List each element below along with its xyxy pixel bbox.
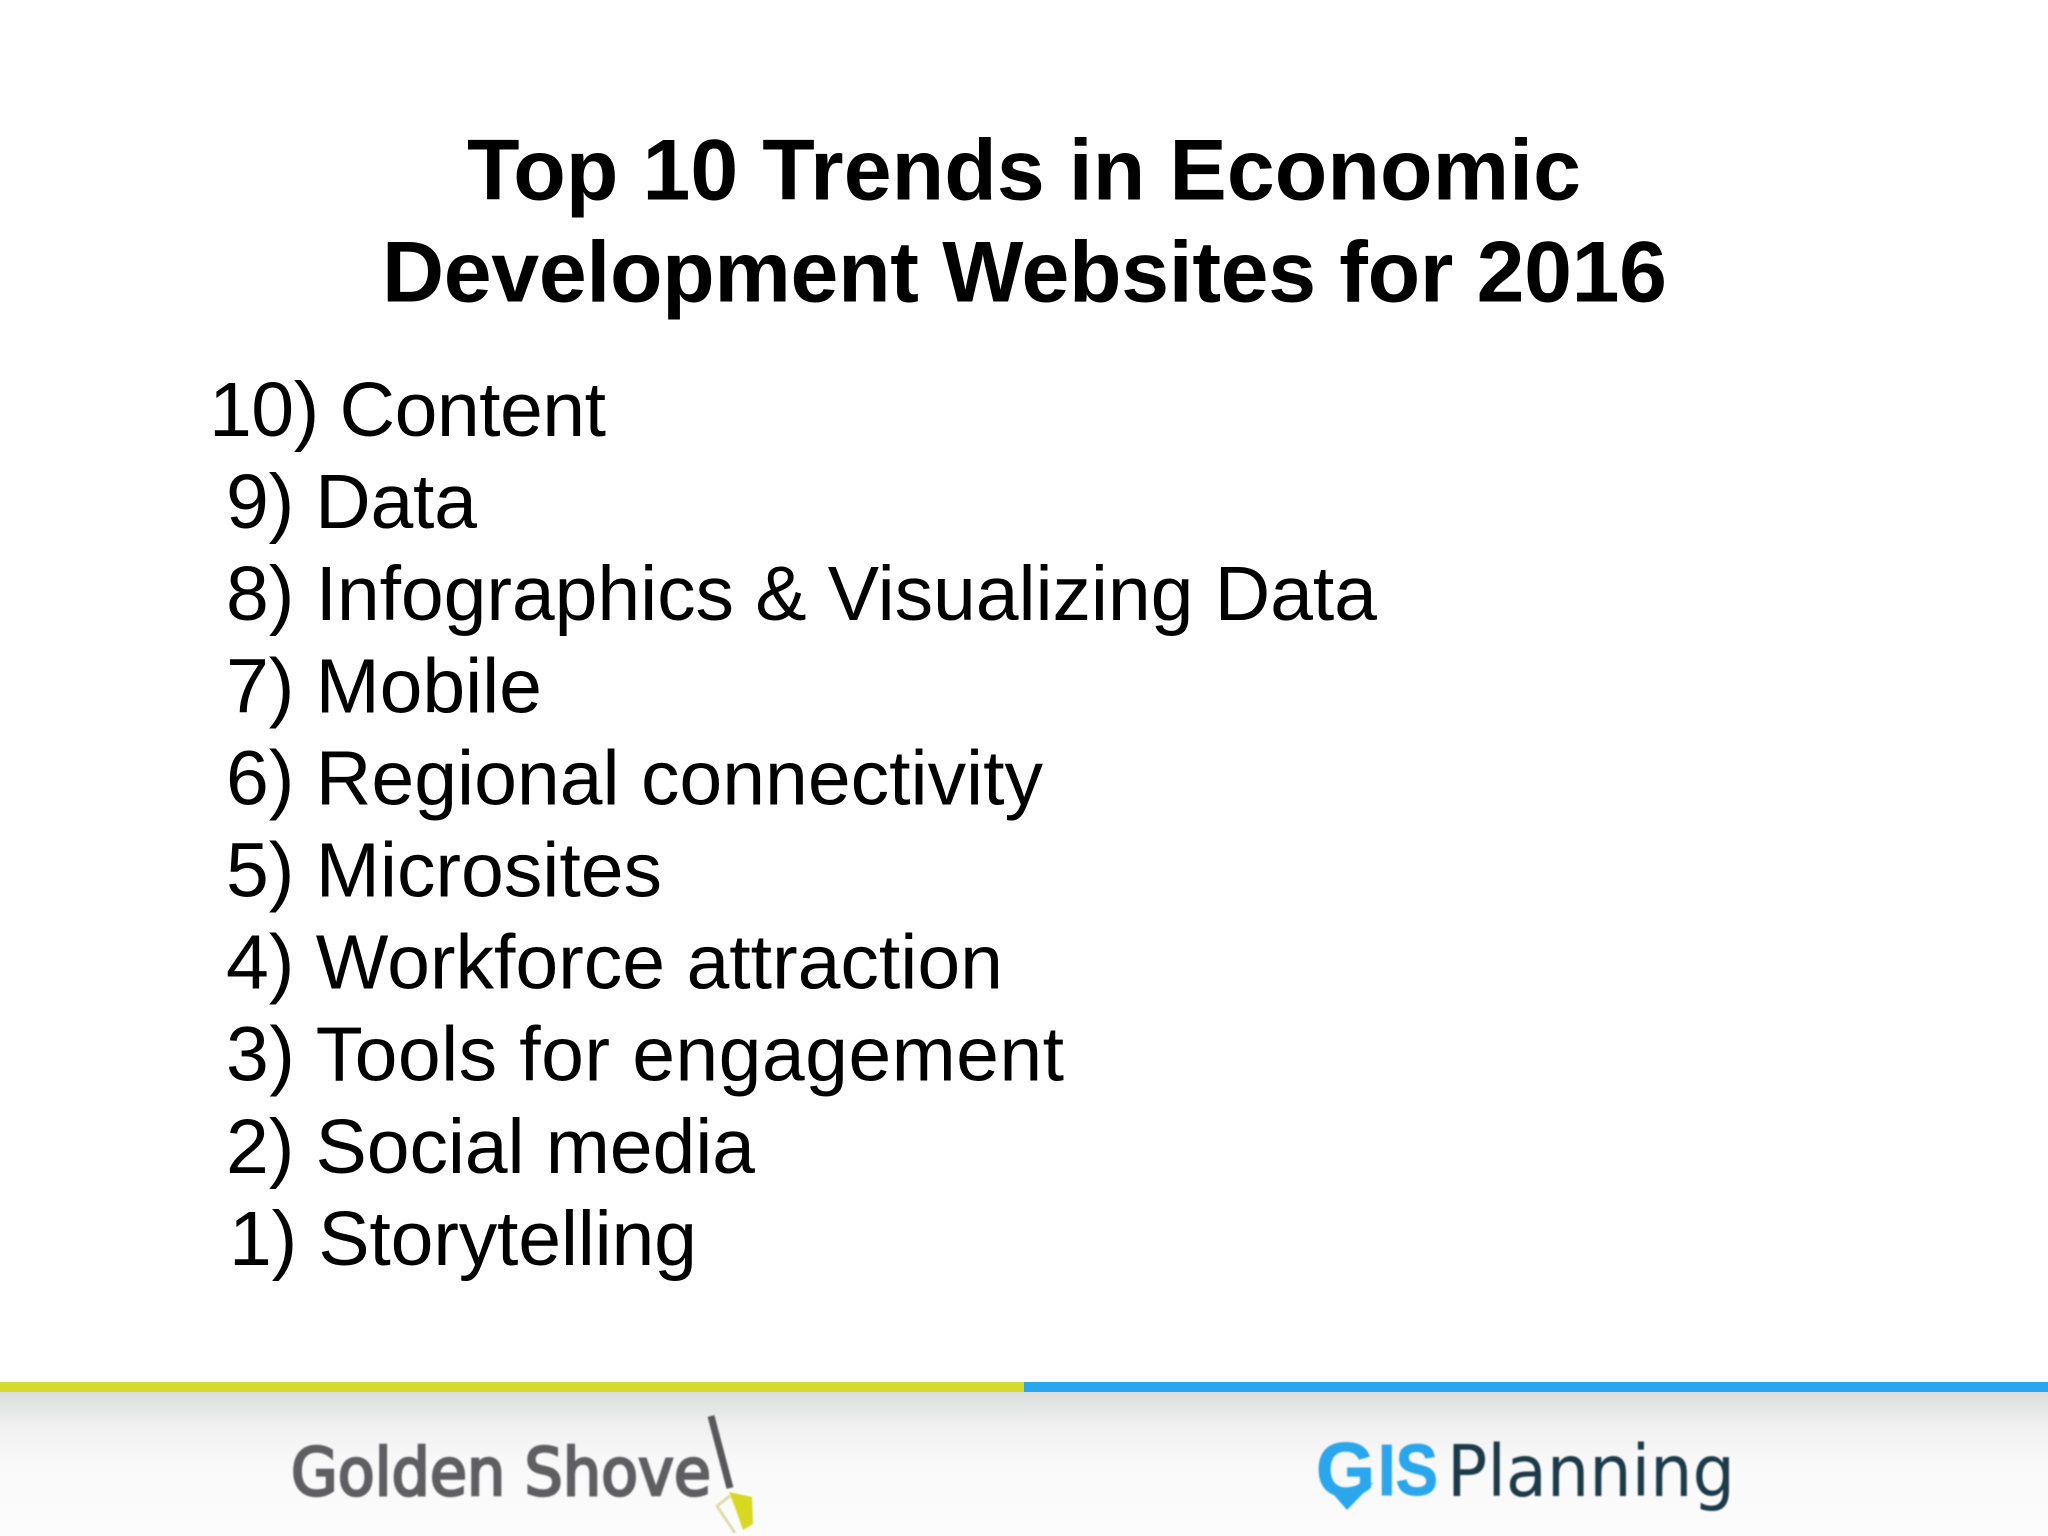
icon: map pin tip <box>1321 1480 1374 1510</box>
logo: Golden Shovel <box>291 1416 753 1533</box>
logo: GIS Planning: G <box>1316 1428 1375 1513</box>
logo: Golden Shovel: Golden Shove <box>291 1434 711 1511</box>
ranked trends list: 7) Mobile <box>226 643 542 729</box>
ranked trends list: 4) Workforce attraction <box>226 920 1003 1006</box>
logo: GIS Planning: Planning <box>1447 1430 1735 1513</box>
ranked trends list: 6) Regional connectivity <box>226 735 1044 821</box>
logo: GIS Planning: IS <box>1378 1431 1438 1511</box>
title: Development Websites for 2016 <box>382 225 1667 321</box>
ranked trends list <box>209 367 1377 1282</box>
ranked trends list: 8) Infographics & Visualizing Data <box>226 551 1377 637</box>
icon: shovel <box>711 1416 753 1533</box>
footer band <box>0 1382 2048 1536</box>
ranked trends list: 1) Storytelling <box>229 1196 697 1282</box>
ranked trends list: 9) Data <box>226 459 477 545</box>
ranked trends list: 2) Social media <box>226 1104 755 1190</box>
title <box>382 122 1667 321</box>
title: Top 10 Trends in Economic <box>467 122 1581 218</box>
ranked trends list: 5) Microsites <box>226 828 662 914</box>
ranked trends list: 10) Content <box>209 367 606 453</box>
ranked trends list: 3) Tools for engagement <box>226 1012 1064 1098</box>
logo: GIS Planning <box>1316 1428 1735 1513</box>
